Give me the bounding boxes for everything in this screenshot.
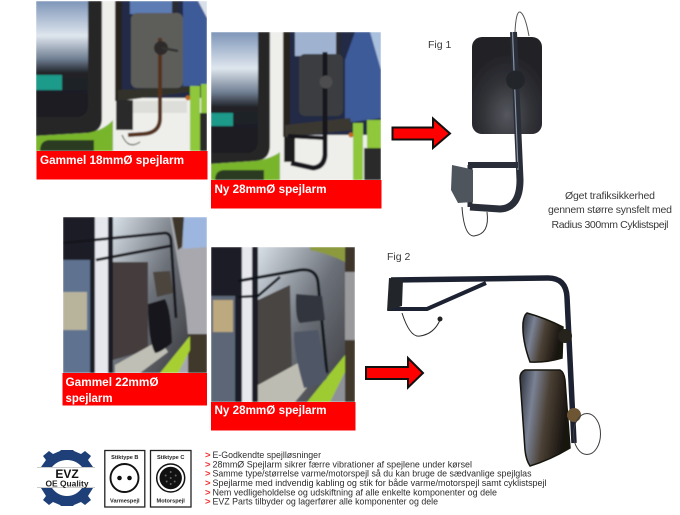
cable top [515,12,529,36]
window left [36,1,102,136]
text block: feature list: E-Godkendte spejlløsninger [212,450,321,460]
mirror [131,13,183,88]
windscreen [258,247,345,402]
bracket [116,100,133,130]
cable bottom [462,207,487,236]
heading: Fig 1: Fig 1 [428,39,452,51]
text: traffic safety note [548,190,672,231]
text block: feature list: > [205,497,211,508]
text block: feature list: > [205,450,211,461]
mirrors [148,299,172,353]
mirrors [296,294,325,323]
photo panel: new 28mm arm, side [211,247,356,430]
text: traffic safety note: gennem større synsfelt med [548,204,672,216]
text block: feature list: > [205,487,211,498]
icon: Stiktype B socket: Stiktype B [111,455,138,461]
photo panel: new 28mm arm [211,32,382,208]
arrow: figure 2 [366,358,423,388]
cable [402,313,440,336]
label bar: Ny 28mm [211,180,382,208]
windscreen [113,217,190,373]
photo panel: old 18mm arm [36,1,208,180]
large mirror [520,370,570,466]
text: traffic safety note: Øget trafiksikkerhed [565,190,655,202]
mirror [299,54,343,116]
heading: Fig 2: Fig 2 [387,251,411,263]
arrow: figure 1 [392,118,450,148]
icon: Stiktype C socket: Stiktype C [157,455,184,461]
cable loop [574,414,600,454]
logo: EVZ OE Quality: OE Quality [46,480,89,488]
label bar: Ny 28mm [211,402,356,430]
arm [470,32,520,209]
text block: feature list: Nem vedligeholdelse og udskiftning af alle enkelte komponenter og dele [212,487,497,497]
label bar: Gammel 22mm: Gammel 22mmØ [66,375,158,389]
figure 2: mirrors and arm [387,278,600,466]
text block: feature list: EVZ Parts tilbyder og lagerfører alle komponenter og dele [212,497,438,507]
small mirror [523,313,563,362]
text block: feature list: > [205,478,211,489]
label bar: Ny 28mm: Ny 28mmØ spejlarm [214,403,326,417]
text block: feature list: Samme type/størrelse varme/motorspejl så du kan bruge de sædvanlige spejlglas [212,469,532,479]
joints [558,329,572,343]
text block: feature list: Spejlarme med indvendig kabling og stik for både varme/motorspejl samt cyklistspejl [212,478,546,488]
label bar: Gammel 22mm: spejlarm [66,391,112,405]
photo panel: old 22mm arm [62,217,207,406]
text block: feature list: > [205,459,211,470]
icon: Stiktype B socket: Varmespejl [110,498,140,504]
text block: feature list [205,450,546,508]
logo: EVZ OE Quality: EVZ [55,467,79,481]
arm [63,233,176,318]
text block: feature list: > [205,469,211,480]
green body [36,120,113,151]
label bar: Gammel 18mm [36,151,208,180]
label bar: Gammel 18mm: Gammel 18mmØ spejlarm [40,153,184,167]
bracket [451,165,473,203]
bracket [284,137,295,162]
arm [391,278,574,443]
icon: Stiktype C socket [150,450,191,507]
right window [115,1,207,98]
logo: EVZ OE Quality [37,450,95,506]
label bar: Ny 28mm: Ny 28mmØ spejlarm [214,182,326,196]
mirror head [472,37,542,134]
arm [238,270,327,373]
text block: feature list: 28mmØ Spejlarm sikrer færre vibrationer af spejlene under kørsel [212,459,472,469]
text: traffic safety note: Radius 300mm Cyklistspejl [552,219,668,231]
bracket [387,278,403,311]
icon: Stiktype B socket [105,450,145,507]
ball joint [506,70,525,90]
label bar: Gammel 22mm [62,373,207,406]
figure 1: mirror and arm [451,12,542,236]
outside [183,217,207,249]
icon: Stiktype C socket: Motorspejl [157,498,185,504]
